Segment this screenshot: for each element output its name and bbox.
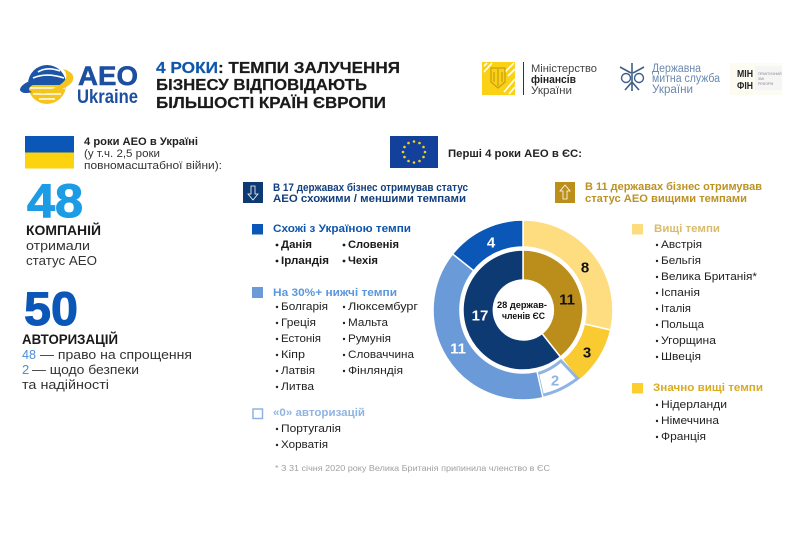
legend group: higher pace: Вищі темпи: [654, 223, 720, 235]
donut chart: [433, 220, 613, 400]
legend group: 30%+ lower pace: Фінляндія: [348, 365, 403, 377]
logo: State Customs Service of Ukraine: [620, 63, 721, 96]
chart values: 2: [551, 372, 559, 390]
legend group: higher pace: Бельгія: [661, 255, 701, 267]
chart values: 11: [559, 292, 575, 308]
chart values: 3: [583, 344, 591, 362]
legend group: much higher pace: [632, 382, 763, 443]
stat: 50 authorizations: 50: [24, 282, 78, 335]
outer ring: higher pace 8: [523, 220, 613, 330]
logo: AEO Ukraine: Ukraine: [77, 87, 138, 108]
legend group: 30%+ lower pace: Естонія: [281, 333, 321, 345]
legend group: 30%+ lower pace: На 30%+ нижчі темпи: [273, 287, 397, 299]
heading: 4 years of AEO in Ukraine: (у т.ч. 2,5 роки: [84, 148, 160, 160]
title: : ТЕМПИ ЗАЛУЧЕННЯ: [218, 60, 400, 77]
heading: 11 states: [585, 181, 762, 205]
heading: 11 states: В 11 державах бізнес отримував: [585, 181, 762, 193]
inner ring: lower 17: [463, 250, 560, 370]
legend group: similar pace: [252, 223, 411, 267]
chart values: 8: [581, 260, 589, 276]
legend group: 30%+ lower pace: Греція: [281, 317, 316, 329]
logo: MinFin: [730, 63, 782, 95]
logo: MinFin: РЕФОРМ: [758, 82, 773, 86]
stat: 48 companies: отримали: [26, 238, 90, 253]
legend group: 30%+ lower pace: Литва: [281, 381, 315, 393]
legend group: zero authorizations: Хорватія: [281, 439, 328, 451]
heading: first 4 years of AEO in EU: Перші 4 роки АЕО в ЄС:: [448, 148, 582, 160]
footnote: * З 31 січня 2020 року Велика Британія припинила членство в ЄС: [275, 464, 550, 473]
legend group: higher pace: Італія: [661, 303, 691, 315]
inner ring: higher 11: [523, 250, 583, 357]
title: БІЛЬШОСТІ КРАЇН ЄВРОПИ: [156, 95, 386, 112]
flag: EU: [390, 136, 438, 168]
stat: 50 authorizations: [22, 282, 192, 392]
heading: 11 states: статус АЕО вищими темпами: [585, 193, 747, 205]
chart values: 4: [487, 234, 496, 252]
title: 4 РОКИ: [156, 60, 218, 77]
heading: 4 years of AEO in Ukraine: повномасштабної війни):: [84, 160, 222, 172]
stat: 50 authorizations: 48: [22, 347, 36, 362]
legend group: 30%+ lower pace: [252, 287, 418, 393]
logo: Ministry of Finance of Ukraine: [482, 62, 597, 97]
legend group: 30%+ lower pace: Люксембург: [348, 301, 418, 313]
legend group: similar pace: Данія: [281, 239, 312, 251]
legend group: similar pace: Ірландія: [281, 255, 329, 267]
chart centre label: 28 держав-: [497, 300, 547, 310]
legend group: similar pace: Схожі з Україною темпи: [273, 223, 411, 235]
logo: MinFin: МІН: [737, 68, 753, 80]
legend group: higher pace: Угорщина: [661, 335, 717, 347]
logo: AEO Ukraine: [20, 61, 138, 108]
legend group: zero authorizations: «0» авторизацій: [273, 407, 365, 419]
legend group: higher pace: [632, 223, 758, 363]
legend group: zero authorizations: [253, 407, 365, 451]
logo: State Customs Service of Ukraine: Державна: [652, 63, 702, 75]
legend group: much higher pace: Значно вищі темпи: [653, 382, 763, 394]
legend group: much higher pace: Франція: [661, 431, 706, 443]
stat: 48 companies: 48: [27, 174, 83, 227]
legend group: higher pace: Австрія: [661, 239, 702, 251]
logo: State Customs Service of Ukraine: України: [652, 84, 693, 96]
stat: 50 authorizations: 2: [22, 362, 29, 377]
legend group: similar pace: Чехія: [348, 255, 378, 267]
stat: 48 companies: [26, 174, 101, 268]
icon: up arrow: [555, 182, 575, 203]
legend group: 30%+ lower pace: Мальта: [348, 317, 389, 329]
heading: 17 states: АЕО схожими / меншими темпами: [273, 193, 466, 205]
stat: 50 authorizations: АВТОРИЗАЦІЙ: [22, 332, 118, 347]
flag: Ukraine: [25, 136, 74, 168]
icon: down arrow: [243, 182, 263, 203]
chart values: [450, 234, 591, 390]
stat: 50 authorizations: та надійності: [22, 377, 109, 392]
chart values: 11: [450, 340, 466, 358]
stat: 48 companies: КОМПАНІЙ: [26, 223, 101, 238]
stat: 48 companies: статус АЕО: [26, 253, 97, 268]
legend group: zero authorizations: Португалія: [281, 423, 341, 435]
heading: 17 states: В 17 державах бізнес отримував статус: [273, 182, 468, 194]
outer ring: lower pace 11: [433, 254, 543, 400]
logo: MinFin: ФІН: [737, 80, 753, 92]
legend group: higher pace: Велика Британія*: [661, 271, 758, 283]
outer ring: much higher pace 3: [562, 324, 611, 380]
legend group: higher pace: Польща: [661, 319, 705, 331]
logo: State Customs Service of Ukraine: митна служба: [652, 73, 721, 85]
legend group: higher pace: Іспанія: [661, 287, 700, 299]
title: [156, 60, 400, 112]
legend group: 30%+ lower pace: Румунія: [348, 333, 391, 345]
stat: 50 authorizations: — право на спрощення: [40, 347, 192, 362]
logo: Ministry of Finance of Ukraine: Міністерство: [531, 63, 597, 75]
heading: 17 states: [273, 182, 468, 205]
legend group: higher pace: Швеція: [661, 351, 701, 363]
logo: MinFin: ЗМІ: [758, 77, 764, 81]
legend group: similar pace: Словенія: [348, 239, 399, 251]
outer ring: zero authorizations 2: [538, 361, 578, 395]
legend group: 30%+ lower pace: Латвія: [281, 365, 315, 377]
chart centre label: [497, 300, 547, 321]
legend group: 30%+ lower pace: Кіпр: [281, 349, 305, 361]
stat: 50 authorizations: — щодо безпеки: [32, 362, 139, 377]
logo: MinFin: ПРАКТИЧНИЙ: [758, 72, 782, 76]
legend group: much higher pace: Нідерланди: [661, 399, 727, 411]
outer ring: similar pace 4: [453, 220, 523, 271]
heading: 4 years of AEO in Ukraine: 4 роки АЕО в Україні: [84, 136, 198, 148]
logo: Ministry of Finance of Ukraine: фінансів: [531, 74, 576, 86]
logo: AEO Ukraine: AEO: [78, 61, 138, 91]
legend group: 30%+ lower pace: Болгарія: [281, 301, 328, 313]
legend group: 30%+ lower pace: Словаччина: [348, 349, 415, 361]
title: БІЗНЕСУ ВІДПОВІДАЮТЬ: [156, 77, 367, 94]
logo: Ministry of Finance of Ukraine: України: [531, 85, 572, 97]
chart centre label: членів ЄС: [502, 311, 545, 321]
chart values: 17: [472, 308, 488, 324]
heading: 4 years of AEO in Ukraine: [84, 136, 222, 172]
legend group: much higher pace: Німеччина: [661, 415, 720, 427]
